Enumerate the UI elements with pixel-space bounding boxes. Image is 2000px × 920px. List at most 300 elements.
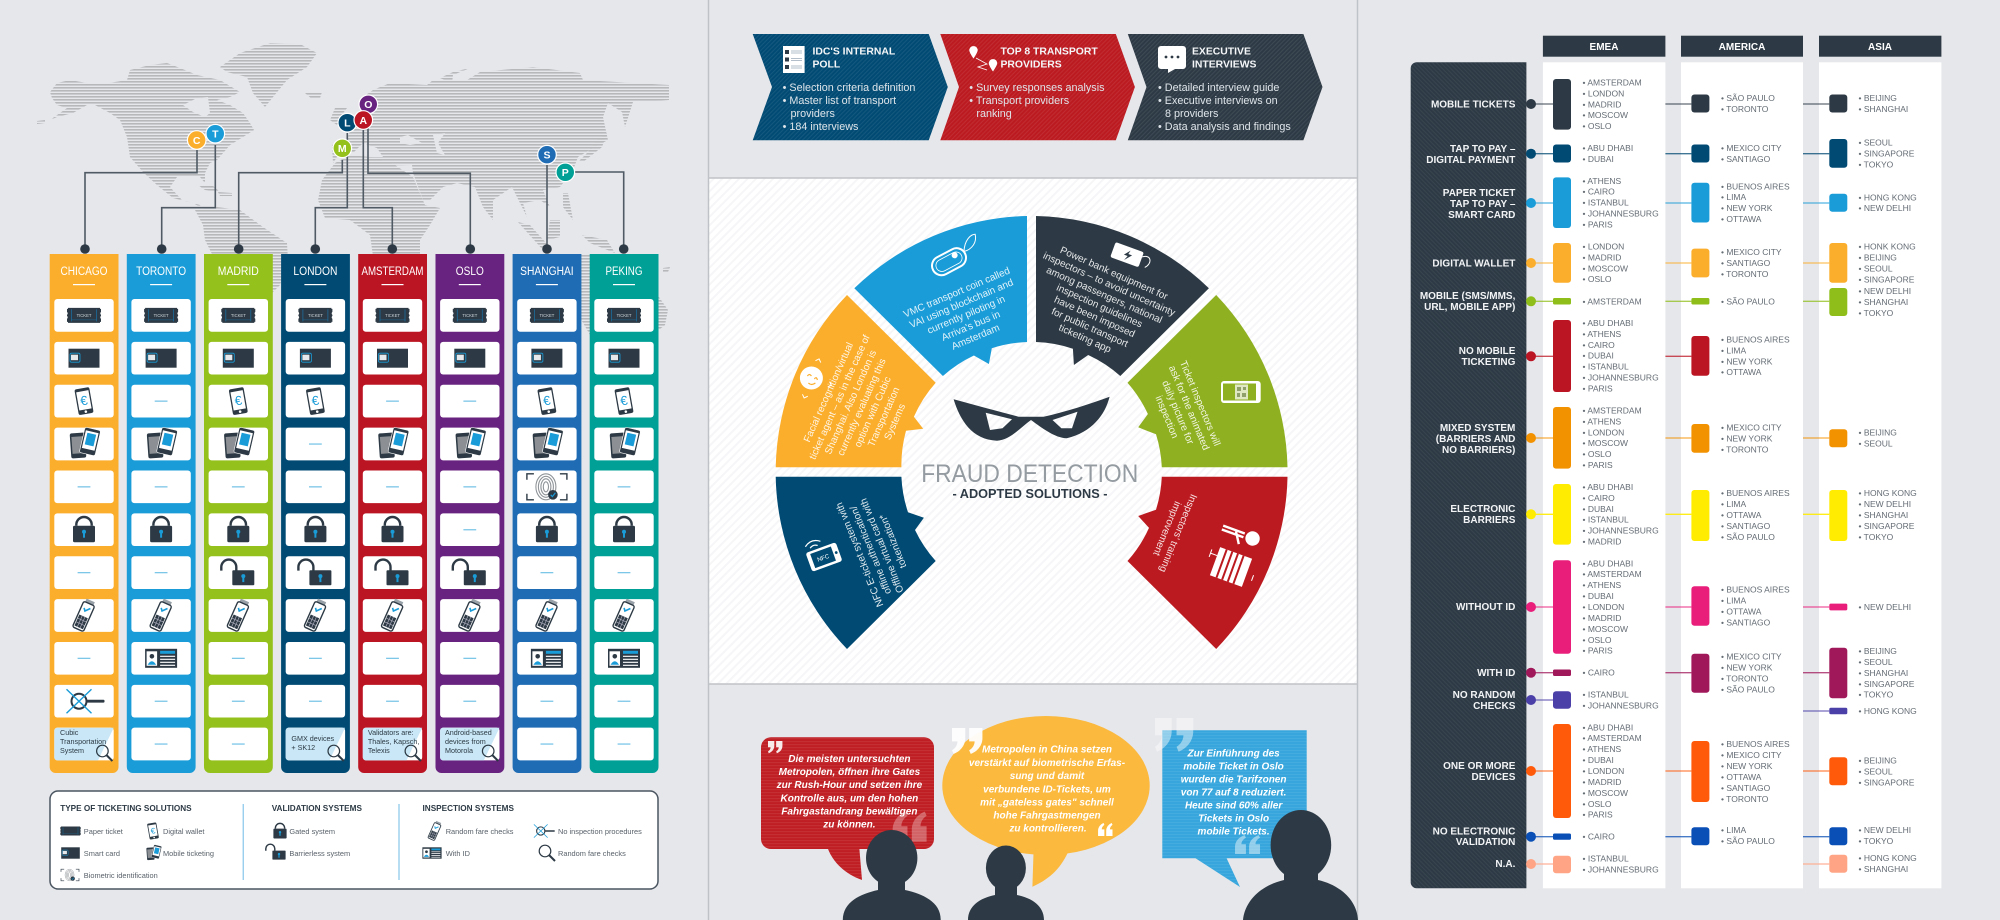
heading: Shanghai: SHANGHAI — [520, 266, 574, 278]
segment text: improvement — [1150, 500, 1183, 557]
row: one or more devices: • BEIJING — [1858, 756, 1897, 766]
card: no inspection procedures — [54, 685, 114, 718]
marker letters: T — [212, 128, 219, 140]
card: gated system — [286, 513, 345, 546]
card: empty note — [209, 728, 268, 760]
quote text: zur Rush-Hour und setzen ihre — [776, 780, 923, 791]
row: no electronic validation: • LIMA — [1721, 825, 1747, 835]
row: paper ticket tap to pay smart card: • HONG KONG — [1858, 192, 1917, 202]
row: one or more devices: • MOSCOW — [1582, 788, 1628, 798]
row: one or more devices: • SANTIAGO — [1721, 783, 1771, 793]
segment text: inspectors – to avoid uncertainty — [1041, 251, 1177, 319]
legend item: barrierless system: Barrierless system — [289, 849, 350, 858]
card: gated system — [54, 513, 114, 546]
card: with ID — [594, 642, 654, 675]
quote text: verbundene ID-Tickets, um — [983, 784, 1111, 795]
card: gated system — [363, 513, 422, 546]
row: paper ticket tap to pay smart card: • BUENOS AIRES — [1721, 181, 1790, 191]
icon: NFC phone: NFC — [817, 554, 831, 564]
card: paper ticket: TICKET — [308, 313, 323, 318]
card: mobile ticketing — [131, 427, 191, 460]
segment text — [834, 487, 920, 608]
row: without ID — [1456, 558, 1911, 656]
icon: coin tag — [927, 234, 985, 279]
row: no mobile ticketing: • ISTANBUL — [1582, 362, 1629, 372]
chevron 2 title: PROVIDERS — [1000, 60, 1062, 70]
segment text: tokenization* — [878, 512, 909, 569]
legend item: with ID: With ID — [446, 849, 470, 858]
row: paper ticket tap to pay smart card: • JOHANNESBURG — [1582, 209, 1659, 219]
segment text: Systems — [883, 402, 908, 442]
panel: Shanghai column — [513, 254, 581, 773]
row: one or more devices: • SEOUL — [1858, 767, 1893, 777]
segment text: currently evaluating this — [836, 357, 889, 458]
card: empty — [131, 685, 191, 718]
row: electronic barriers: • BUENOS AIRES — [1721, 488, 1790, 498]
row: tap to pay digital payment: DIGITAL PAYMENT — [1426, 155, 1515, 166]
card: note on GMX devices — [286, 728, 345, 761]
row: electronic barriers: • LIMA — [1721, 499, 1747, 509]
chevron 2 bullets: • Transport providers — [969, 95, 1070, 107]
row: without ID: • MADRID — [1582, 613, 1621, 623]
segment text — [797, 328, 928, 486]
card: no digital wallet — [440, 385, 500, 417]
card: paper ticket — [517, 299, 577, 332]
row: N.A.: • ISTANBUL — [1582, 854, 1629, 864]
row: without ID: • AMSTERDAM — [1582, 569, 1642, 579]
card: paper ticket: TICKET — [385, 313, 400, 318]
card: smart card — [594, 342, 654, 375]
row: without ID: • SANTIAGO — [1721, 617, 1771, 627]
quote text: Tickets in Oslo — [1198, 814, 1269, 825]
segment text: VMC transport coin called — [902, 266, 1012, 320]
segment text: Shanghai. Also London is — [823, 349, 879, 456]
card: paper ticket — [131, 299, 191, 332]
card: barrierless system — [440, 556, 500, 589]
row: mixed system: NO BARRIERS) — [1442, 445, 1515, 456]
wheel segment: animated picture — [1128, 295, 1288, 467]
legend item: smart card — [61, 847, 120, 859]
card: paper ticket — [209, 299, 268, 332]
segment text: Power bank equipment for — [1058, 245, 1170, 303]
row: N.A.: • SHANGHAI — [1858, 864, 1908, 874]
quote text: Metropolen in China setzen — [982, 745, 1112, 756]
card: no digital wallet — [131, 385, 191, 417]
row: mixed system: • SEOUL — [1858, 439, 1893, 449]
row: with ID: • MEXICO CITY — [1721, 652, 1782, 662]
row: no mobile ticketing: • BUENOS AIRES — [1721, 334, 1790, 344]
chevron 1 bullets: • Master list of transport — [783, 95, 896, 107]
card: paper ticket — [363, 299, 422, 332]
row: one or more devices: • NEW YORK — [1721, 761, 1773, 771]
card: no digital wallet — [363, 385, 422, 417]
segment text: offline authentication/ — [849, 504, 894, 596]
row: tap to pay digital payment: • SEOUL — [1858, 138, 1893, 148]
panel: Toronto column — [127, 254, 196, 773]
card: paper ticket: TICKET — [617, 313, 632, 318]
card: empty — [594, 685, 654, 718]
card: smart card — [517, 342, 577, 375]
row: paper ticket tap to pay smart card: • ATHENS — [1582, 176, 1622, 186]
quote text: Kontrolle aus, um den hohen — [781, 793, 918, 804]
row: tap to pay digital payment: • ABU DHABI — [1582, 143, 1633, 153]
heading: Toronto: TORONTO — [136, 266, 186, 278]
chevron 3 bullets: 8 providers — [1165, 108, 1219, 120]
row: paper ticket tap to pay smart card: • NEW DELHI — [1858, 203, 1911, 213]
row: mixed system: • MOSCOW — [1582, 438, 1628, 448]
segment text: Facial recognition/virtual — [802, 341, 856, 444]
segment text: Inspectors' training — [1157, 492, 1199, 574]
row: N.A.: N.A. — [1495, 859, 1516, 870]
card: mobile ticketing — [363, 427, 422, 460]
row: digital wallet: • MEXICO CITY — [1721, 247, 1782, 257]
row: electronic barriers: • OTTAWA — [1721, 510, 1762, 520]
quote text: hohe Fahrgastmengen — [993, 810, 1101, 821]
card: smart card — [209, 342, 268, 375]
segment text: Amsterdam — [950, 323, 1001, 353]
card: no biometric — [440, 470, 500, 503]
row: with ID: WITH ID — [1477, 668, 1515, 679]
row: no mobile ticketing: NO MOBILE — [1459, 346, 1516, 357]
card: smart card — [440, 342, 500, 375]
row: with ID: • SINGAPORE — [1858, 679, 1915, 689]
card: empty — [517, 685, 577, 718]
chevron: IDC's internal poll — [753, 34, 948, 140]
row: with ID: • SÃO PAULO — [1721, 684, 1775, 694]
card: note on Cubic: System — [60, 746, 84, 755]
card: note on validators: Telexis — [368, 746, 390, 755]
card: mobile ticketing — [517, 427, 577, 460]
row: mobile tickets: • AMSTERDAM — [1582, 77, 1642, 87]
row: no random checks: • HONG KONG — [1858, 706, 1917, 716]
card: random fare checks — [440, 598, 500, 632]
panel: Oslo column — [436, 254, 504, 773]
card: no biometric — [209, 470, 268, 503]
card: digital wallet — [517, 385, 577, 417]
row: mobile tickets: • SHANGHAI — [1858, 104, 1908, 114]
segment text: ticket agent – as in the case of — [808, 333, 873, 461]
row: one or more devices: ONE OR MORE — [1443, 761, 1516, 772]
row: with ID: • NEW YORK — [1721, 663, 1773, 673]
card: random fare checks — [131, 598, 191, 632]
region column: Asia: ASIA — [1868, 42, 1892, 53]
legend item: paper ticket — [60, 826, 123, 836]
quote text: Die meisten untersuchten — [788, 754, 911, 765]
icon: phone with QR code — [1221, 381, 1261, 403]
card: digital wallet — [54, 385, 114, 417]
row: with ID: • SEOUL — [1858, 657, 1893, 667]
quote text: Metropolen, öffnen ihre Gates — [779, 767, 921, 778]
row: electronic barriers: • SÃO PAULO — [1721, 532, 1775, 542]
row: tap to pay digital payment: • SANTIAGO — [1721, 154, 1771, 164]
legend item: paper ticket: Paper ticket — [84, 827, 123, 836]
row: no mobile ticketing: TICKETING — [1462, 357, 1516, 368]
quote text: mobile Tickets. — [1198, 827, 1270, 838]
card: digital wallet — [209, 385, 268, 417]
row: mixed system: • LONDON — [1582, 427, 1624, 437]
heading: Amsterdam: AMSTERDAM — [362, 266, 424, 278]
card: barrierless system — [209, 556, 268, 589]
quote text: von 77 auf 8 reduziert. — [1181, 787, 1286, 798]
legend heading: ticketing: TYPE OF TICKETING SOLUTIONS — [60, 804, 192, 813]
segment text — [902, 266, 1031, 365]
row: one or more devices: • LONDON — [1582, 766, 1624, 776]
row: no random checks: • JOHANNESBURG — [1582, 700, 1659, 710]
card: gated system — [594, 513, 654, 546]
row: mixed system: • AMSTERDAM — [1582, 405, 1642, 415]
row: tap to pay digital payment: TAP TO PAY – — [1450, 144, 1516, 155]
row: tap to pay digital payment — [1426, 138, 1915, 169]
row: one or more devices: • SINGAPORE — [1858, 777, 1915, 787]
panel: Peking column — [590, 254, 658, 773]
row: electronic barriers: • SINGAPORE — [1858, 521, 1915, 531]
card: random fare checks — [54, 598, 114, 632]
row: without ID: • ABU DHABI — [1582, 558, 1633, 568]
legend item: biometric: Biometric identification — [84, 871, 158, 880]
heading: Peking: PEKING — [606, 266, 643, 278]
row: no mobile ticketing: • CAIRO — [1582, 340, 1615, 350]
row: mobile SMS MMS URL app: MOBILE (SMS/MMS, — [1420, 291, 1516, 302]
legend item: random fare checks 2 — [539, 845, 626, 861]
row: digital wallet: • SINGAPORE — [1858, 274, 1915, 284]
row: N.A. — [1495, 853, 1917, 874]
row: no mobile ticketing: • PARIS — [1582, 383, 1613, 393]
silhouette: person 1 — [843, 830, 941, 920]
card: gated system — [131, 513, 191, 546]
segment text: Transportation — [866, 386, 902, 449]
segment text: inspection — [1153, 394, 1180, 440]
panel: Amsterdam column — [358, 254, 427, 773]
row: paper ticket tap to pay smart card: • OTTAWA — [1721, 214, 1762, 224]
card: note on Android devices — [440, 728, 500, 761]
card: gated system — [517, 513, 577, 546]
card: no ID — [363, 642, 422, 675]
segment text: have been imposed — [1052, 295, 1136, 340]
row: electronic barriers: • CAIRO — [1582, 493, 1615, 503]
row: mobile SMS MMS URL app: URL, MOBILE APP) — [1424, 302, 1515, 313]
silhouette: person 2 — [968, 846, 1044, 920]
card: mobile ticketing — [54, 427, 114, 460]
subtitle: adopted solutions: - ADOPTED SOLUTIONS - — [952, 487, 1108, 501]
card: random fare checks — [286, 598, 345, 632]
row: N.A.: • JOHANNESBURG — [1582, 864, 1659, 874]
row: no electronic validation: • SÃO PAULO — [1721, 836, 1775, 846]
row: mixed system: MIXED SYSTEM — [1440, 423, 1515, 434]
row: mixed system: • OSLO — [1582, 449, 1612, 459]
card: no ID — [286, 642, 345, 675]
legend item: random fare checks 2: Random fare checks — [558, 849, 626, 858]
row: with ID: • CAIRO — [1582, 668, 1615, 678]
row: mobile tickets: • BEIJING — [1858, 93, 1897, 103]
row: no mobile ticketing: • NEW YORK — [1721, 356, 1773, 366]
row: no mobile ticketing — [1459, 318, 1790, 393]
card: mobile ticketing — [440, 427, 500, 460]
row: with ID: • BEIJING — [1858, 646, 1897, 656]
row: one or more devices: • TORONTO — [1721, 794, 1769, 804]
card: paper ticket — [594, 299, 654, 332]
chevron: top 8 transport providers — [940, 34, 1135, 140]
legend item: digital wallet — [147, 822, 204, 840]
row: digital wallet: • HONK KONG — [1858, 242, 1916, 252]
row: digital wallet — [1432, 241, 1916, 284]
icon: checklist — [783, 46, 805, 73]
row: tap to pay digital payment: • MEXICO CITY — [1721, 143, 1782, 153]
segment text: daily picture for — [1159, 379, 1196, 447]
row: digital wallet: • BEIJING — [1858, 253, 1897, 263]
row: mobile tickets — [1431, 77, 1908, 131]
segment text — [1144, 359, 1222, 462]
row: with ID: • TOKYO — [1858, 690, 1894, 700]
row: without ID: • PARIS — [1582, 646, 1613, 656]
card: empty — [286, 685, 345, 718]
marker letters: S — [543, 150, 551, 162]
row: one or more devices: • ABU DHABI — [1582, 722, 1633, 732]
card: mobile ticketing — [209, 427, 268, 460]
connector lines from city markers to columns — [85, 125, 624, 249]
chevron 1 title: IDC'S INTERNAL — [812, 46, 896, 58]
legend item: mobile ticketing: Mobile ticketing — [163, 849, 214, 858]
card: no barrierless — [131, 556, 191, 589]
card: note on GMX devices: GMX devices — [291, 734, 335, 743]
card: paper ticket: TICKET — [539, 313, 555, 318]
chevron: executive interviews — [1128, 34, 1322, 140]
card: no barrierless — [517, 556, 577, 589]
connector end dots — [80, 244, 628, 254]
card: no gated system — [440, 513, 500, 546]
panel: legend — [50, 791, 658, 889]
card: paper ticket: TICKET — [231, 313, 246, 318]
card: paper ticket — [286, 299, 345, 332]
quote text: zu können. — [822, 819, 876, 830]
row: mobile SMS MMS URL app: • NEW DELHI — [1858, 286, 1911, 296]
row: without ID: • LONDON — [1582, 602, 1624, 612]
card: empty note — [594, 728, 654, 760]
chevron 3 bullets: • Data analysis and findings — [1158, 121, 1291, 133]
row: digital wallet: • LONDON — [1582, 241, 1624, 251]
row: no mobile ticketing: • OTTAWA — [1721, 367, 1762, 377]
row: mobile SMS MMS URL app: • AMSTERDAM — [1582, 296, 1642, 306]
row: no mobile ticketing: • LIMA — [1721, 345, 1747, 355]
legend item: smart card: Smart card — [84, 849, 120, 858]
row: no mobile ticketing: • JOHANNESBURG — [1582, 373, 1659, 383]
chevron 3 title: EXECUTIVE — [1192, 46, 1251, 58]
row: tap to pay digital payment: • SINGAPORE — [1858, 149, 1915, 159]
panel: London column — [281, 254, 350, 773]
chevron 3 bullets: • Executive interviews on — [1158, 95, 1278, 107]
row: digital wallet: • TORONTO — [1721, 269, 1769, 279]
heading: Madrid: MADRID — [218, 266, 259, 278]
marker letters: P — [562, 167, 569, 179]
chevron 1 bullets: providers — [790, 108, 836, 120]
row: with ID — [1477, 646, 1915, 700]
segment text: inspection guidelines — [1055, 283, 1144, 330]
row: electronic barriers: • ABU DHABI — [1582, 482, 1633, 492]
marker letters — [193, 99, 569, 179]
segment text: VAI using blockchain and — [908, 277, 1015, 331]
chevron 2 title: TOP 8 TRANSPORT — [1000, 46, 1098, 58]
legend item: no inspection: No inspection procedures — [558, 827, 642, 836]
icon: power bank — [1110, 242, 1152, 270]
card: no barrierless — [594, 556, 654, 589]
chevron 3 bullets: • Detailed interview guide — [1158, 82, 1279, 94]
row: electronic barriers: • TOKYO — [1858, 532, 1894, 542]
card: note on Android devices: devices from — [445, 737, 486, 746]
row: no electronic validation: • TOKYO — [1858, 836, 1894, 846]
row: without ID: • MOSCOW — [1582, 624, 1628, 634]
card: paper ticket: TICKET — [154, 313, 169, 318]
city markers — [187, 95, 575, 182]
card: digital wallet — [594, 385, 654, 417]
quote text: mobile Ticket in Oslo — [1183, 761, 1284, 772]
legend item: with ID — [422, 847, 470, 859]
row: one or more devices: DEVICES — [1471, 772, 1516, 783]
wheel segment: facial recognition — [776, 295, 936, 486]
row: paper ticket tap to pay smart card: • NEW YORK — [1721, 203, 1773, 213]
quote text: wurden die Tarifzonen — [1181, 774, 1286, 785]
row: no electronic validation: NO ELECTRONIC — [1433, 826, 1515, 838]
card: note on Cubic: Cubic — [60, 728, 79, 737]
card: random fare checks — [363, 598, 422, 632]
segment text: Offline virtual card with — [858, 497, 907, 594]
row: without ID: • BUENOS AIRES — [1721, 585, 1790, 595]
region column: Asia — [1819, 36, 1941, 888]
quote text: Heute sind 60% aller — [1185, 800, 1283, 811]
row: one or more devices — [1443, 722, 1915, 820]
row: one or more devices: • OTTAWA — [1721, 772, 1762, 782]
row: mobile tickets: MOBILE TICKETS — [1431, 100, 1516, 110]
icon: NFC phone — [802, 534, 842, 572]
quote text: zu kontrollieren. — [1008, 823, 1087, 834]
row: paper ticket tap to pay smart card: • ISTANBUL — [1582, 198, 1629, 208]
card: no biometric — [54, 470, 114, 503]
row: no random checks: NO RANDOM — [1453, 690, 1515, 701]
row: no electronic validation: • CAIRO — [1582, 832, 1615, 842]
quote: red speech bubble — [761, 737, 934, 880]
quote text: mit „gateless gates" schnell — [980, 797, 1114, 808]
marker letters: O — [364, 99, 372, 111]
row: digital wallet: DIGITAL WALLET — [1432, 258, 1515, 270]
row: electronic barriers: • MADRID — [1582, 537, 1621, 547]
card: smart card — [286, 342, 345, 375]
row: paper ticket tap to pay smart card: TAP TO PAY – — [1450, 199, 1516, 210]
row: paper ticket tap to pay smart card: SMART CARD — [1448, 210, 1515, 221]
heading: Chicago: CHICAGO — [60, 266, 108, 278]
panel: Madrid column — [204, 254, 273, 773]
card: barrierless system — [286, 556, 345, 589]
wheel segment: VMC transport coin — [854, 216, 1031, 376]
row: electronic barriers: • DUBAI — [1582, 504, 1614, 514]
right panel: row label column — [1411, 62, 1526, 888]
row: mobile SMS MMS URL app: • TOKYO — [1858, 308, 1894, 318]
row: electronic barriers: • NEW DELHI — [1858, 499, 1911, 509]
card: note on Cubic — [54, 728, 114, 761]
row: without ID: • ATHENS — [1582, 580, 1622, 590]
card: random fare checks — [594, 598, 654, 632]
legend item: gated system — [273, 823, 335, 839]
row: tap to pay digital payment: • DUBAI — [1582, 154, 1614, 164]
world map — [37, 43, 670, 345]
row: mobile SMS MMS URL app — [1420, 286, 1911, 318]
chevron 3 title: INTERVIEWS — [1192, 60, 1257, 70]
row: paper ticket tap to pay smart card: PAPER TICKET — [1443, 188, 1515, 199]
row: mixed system: • MEXICO CITY — [1721, 422, 1782, 432]
row: one or more devices: • DUBAI — [1582, 755, 1614, 765]
row: electronic barriers: • SHANGHAI — [1858, 510, 1908, 520]
legend item: biometric — [61, 869, 158, 881]
wheel segment: inspectors' training — [1128, 477, 1288, 649]
row: no random checks: • ISTANBUL — [1582, 690, 1629, 700]
row: one or more devices: • ATHENS — [1582, 744, 1622, 754]
